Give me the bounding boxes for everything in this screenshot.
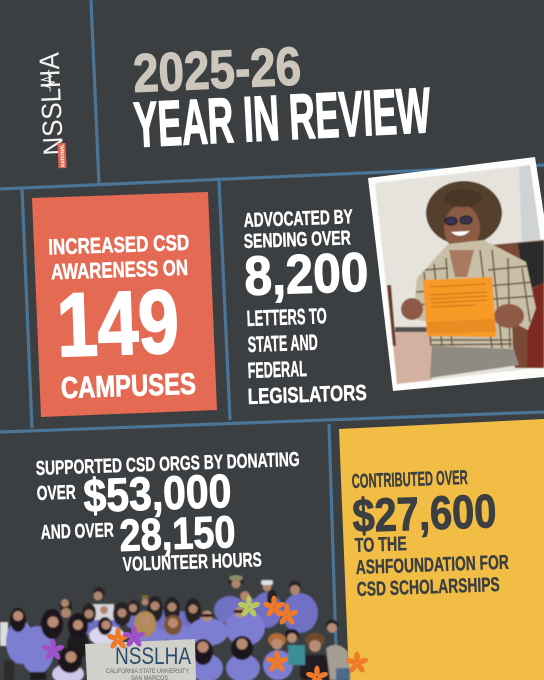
text: to the ashfoundation for CSD scholarships (354, 533, 509, 601)
front row (6, 610, 293, 680)
back row (80, 592, 318, 637)
number: 8,200: 8,200 (243, 241, 369, 307)
title (132, 36, 433, 161)
text: letters to state and federal legislators (246, 303, 367, 409)
banner (85, 639, 196, 680)
logo: NSSLHA: NATIONAL (60, 144, 67, 167)
number: $27,600: $27,600 (351, 484, 497, 542)
number: 28,150: 28,150 (119, 506, 236, 561)
panel: letters (243, 206, 369, 409)
text: letters to state and federal legislators: LEGISLATORS (247, 380, 367, 409)
icons: pinwheel flowers (41, 596, 369, 680)
text: increased CSD awareness on: INCREASED CSD (48, 230, 190, 260)
text: advocated by sending over: ADVOCATED BY (243, 206, 354, 232)
text: and over: AND OVER (40, 519, 115, 544)
text: letters to state and federal legislators: LETTERS TO (246, 303, 327, 331)
text: letters to state and federal legislators: STATE AND (247, 330, 318, 357)
text: campuses: CAMPUSES (60, 368, 196, 405)
text: advocated by sending over: SENDING OVER (243, 227, 351, 253)
text: increased CSD awareness on (48, 230, 190, 284)
photo: student holding orange letter (368, 157, 544, 391)
text: advocated by sending over (243, 206, 354, 253)
text: supported CSD orgs by donating: SUPPORTED CSD ORGS BY DONATING (35, 449, 300, 480)
number: 149: 149 (55, 272, 180, 376)
text: to the ashfoundation for CSD scholarships: TO THE (354, 533, 407, 557)
photo: group in tie-dye shirts with banner (0, 574, 369, 680)
logo: NSSLHA: NSSLHA (34, 52, 69, 156)
number: $53,000: $53,000 (82, 464, 232, 522)
text: increased CSD awareness on: AWARENESS ON (51, 255, 188, 284)
text: letters to state and federal legislators: FEDERAL (247, 356, 307, 383)
text: volunteer hours: VOLUNTEER HOURS (122, 549, 262, 576)
banner: NSSLHA (115, 643, 191, 670)
panel: scholarships (339, 419, 544, 680)
banner: CALIFORNIA STATE UNIVERSITY (106, 669, 189, 675)
panel: 149 campuses (32, 192, 217, 417)
text: over: OVER (36, 482, 77, 505)
title: 2025-26: 2025-26 (132, 36, 302, 104)
panel: donations and volunteer hours (35, 449, 300, 576)
